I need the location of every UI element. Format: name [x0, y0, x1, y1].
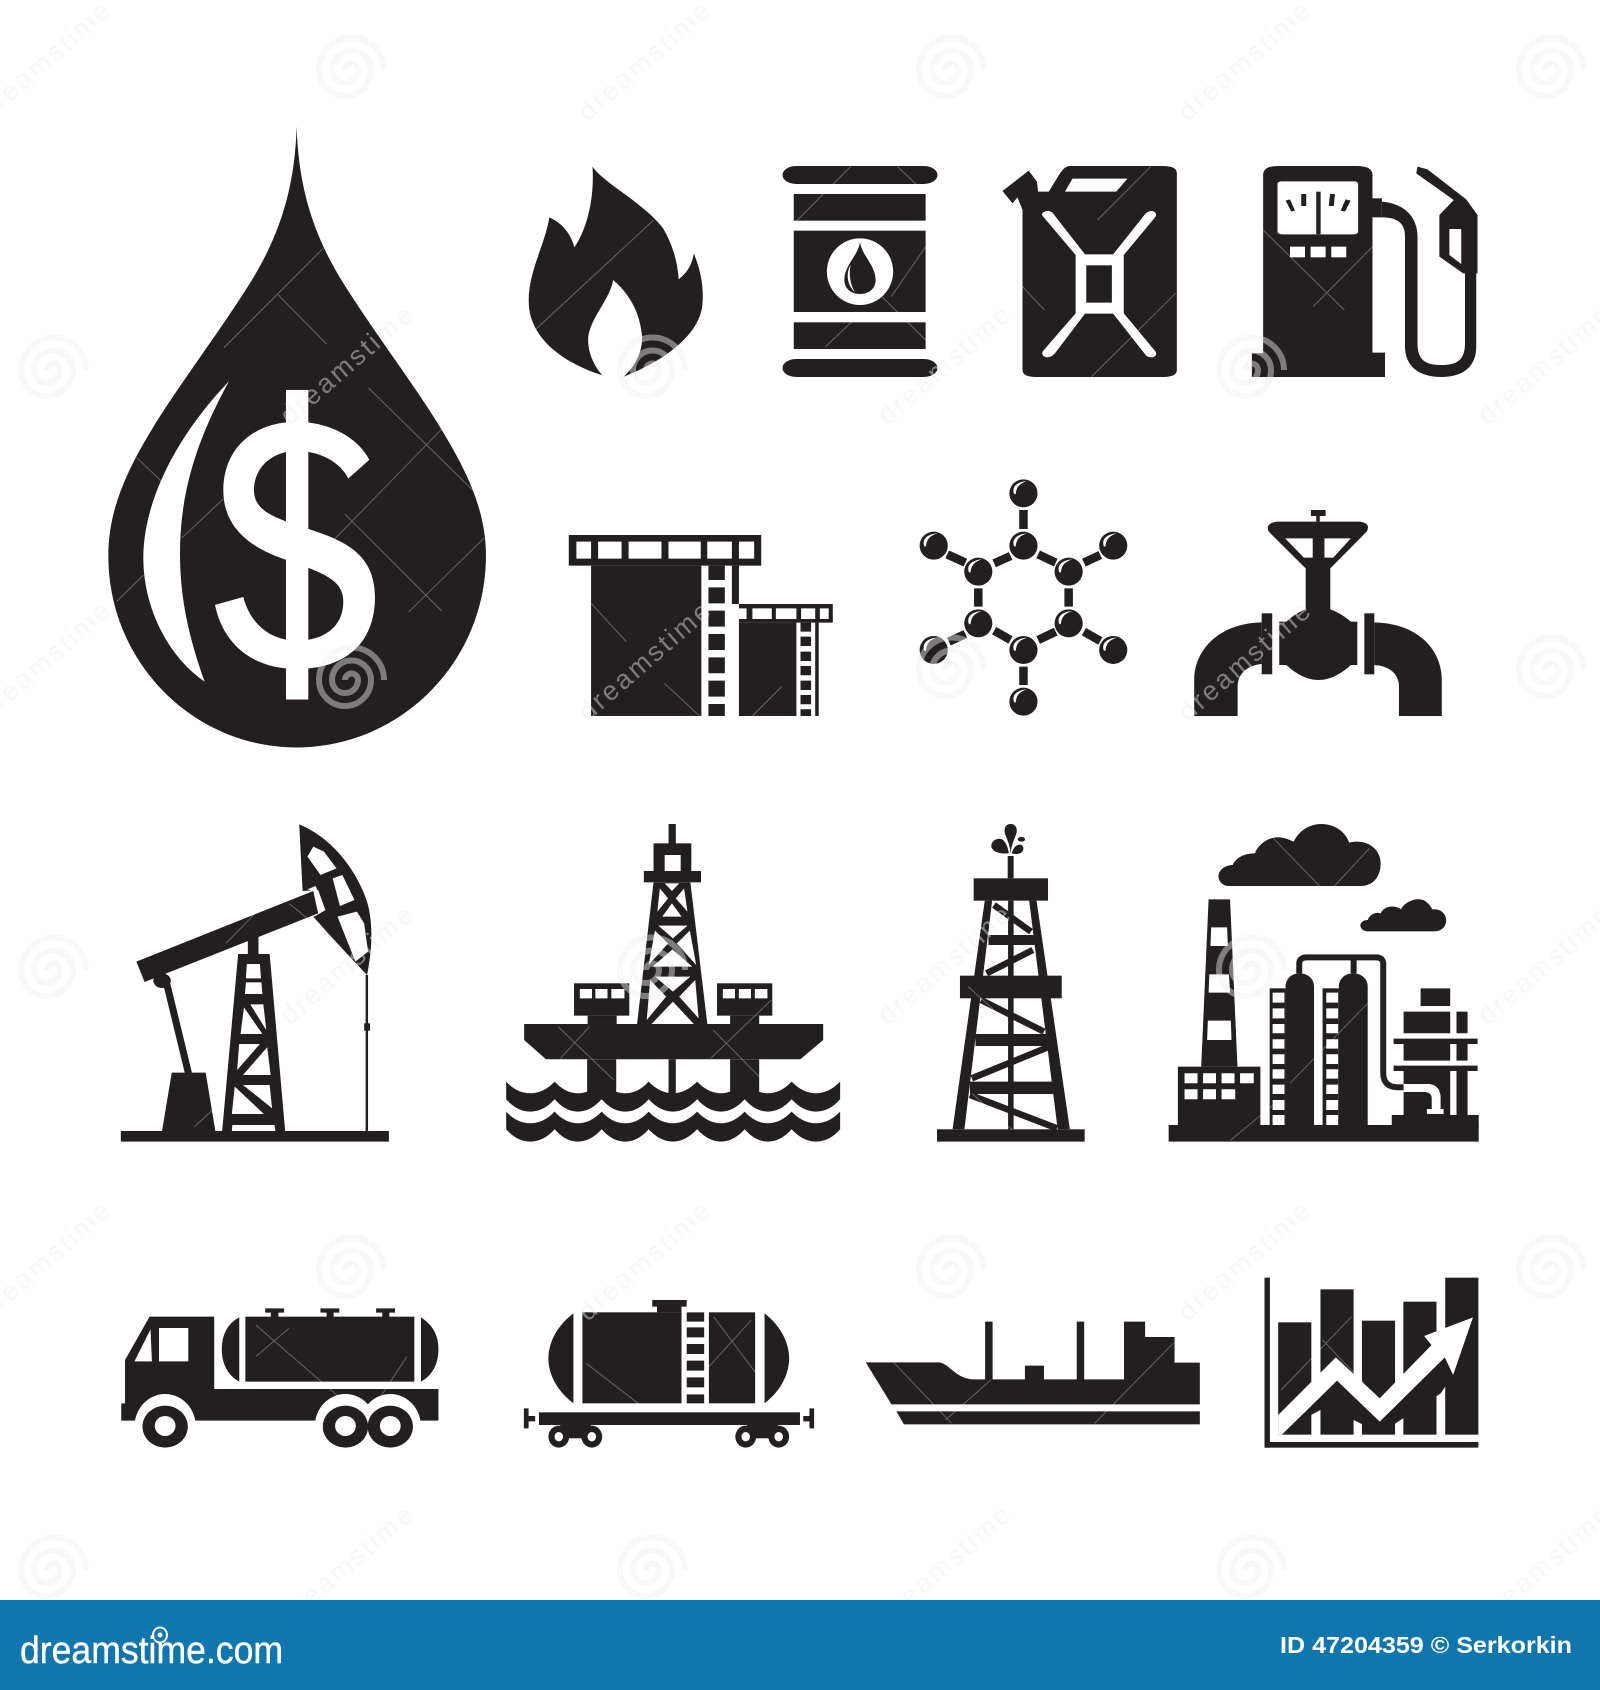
chimney — [1201, 899, 1237, 1067]
image id and credit: ID 47204359 © Serkorkin — [1280, 1632, 1572, 1658]
distillation columns — [1286, 973, 1314, 1125]
icon: pumpjack — [121, 824, 389, 1142]
icon: oil barrel — [782, 166, 938, 377]
right tanks — [1394, 988, 1478, 1125]
footer band — [0, 1600, 1600, 1690]
watermark pattern: dreamstime — [274, 1500, 418, 1631]
footer logo: dreamstime.com — [20, 1630, 283, 1672]
watermark pattern: dreamstime — [572, 596, 716, 727]
icon: rising bar chart with arrow — [1264, 1278, 1478, 1448]
icon: railway tank car — [524, 1300, 814, 1448]
icon: fuel pump — [1252, 166, 1478, 377]
icon: oil derrick — [937, 824, 1085, 1142]
ladders — [1270, 988, 1286, 1125]
watermark pattern: dreamstime — [872, 1500, 1016, 1631]
overhead pipes — [1299, 957, 1405, 1087]
watermark pattern: dreamstime — [572, 1196, 716, 1327]
watermark pattern: dreamstime — [274, 300, 418, 431]
icon: fuel tanker truck — [121, 1308, 438, 1459]
icon: pipeline valve — [1194, 510, 1442, 716]
watermark pattern: dreamstime — [872, 900, 1016, 1031]
watermark pattern: dreamstime — [872, 300, 1016, 431]
small cloud — [1360, 899, 1446, 931]
factory building — [1178, 1067, 1260, 1129]
icon: jerrycan — [1002, 166, 1177, 377]
large cloud — [1218, 824, 1381, 886]
icon: storage tanks — [569, 535, 833, 716]
icon: offshore oil platform — [506, 824, 840, 1142]
icon: refinery with clouds — [1169, 824, 1479, 1142]
watermark pattern: dreamstime — [1172, 1196, 1316, 1327]
icon: benzene molecule — [920, 479, 1127, 716]
icon: oil tanker ship — [866, 1322, 1200, 1424]
icon: oil drop with dollar sign — [108, 126, 486, 747]
icon: flame — [529, 167, 703, 377]
watermark pattern: dreamstime — [1172, 596, 1316, 727]
watermark pattern: dreamstime — [274, 900, 418, 1031]
